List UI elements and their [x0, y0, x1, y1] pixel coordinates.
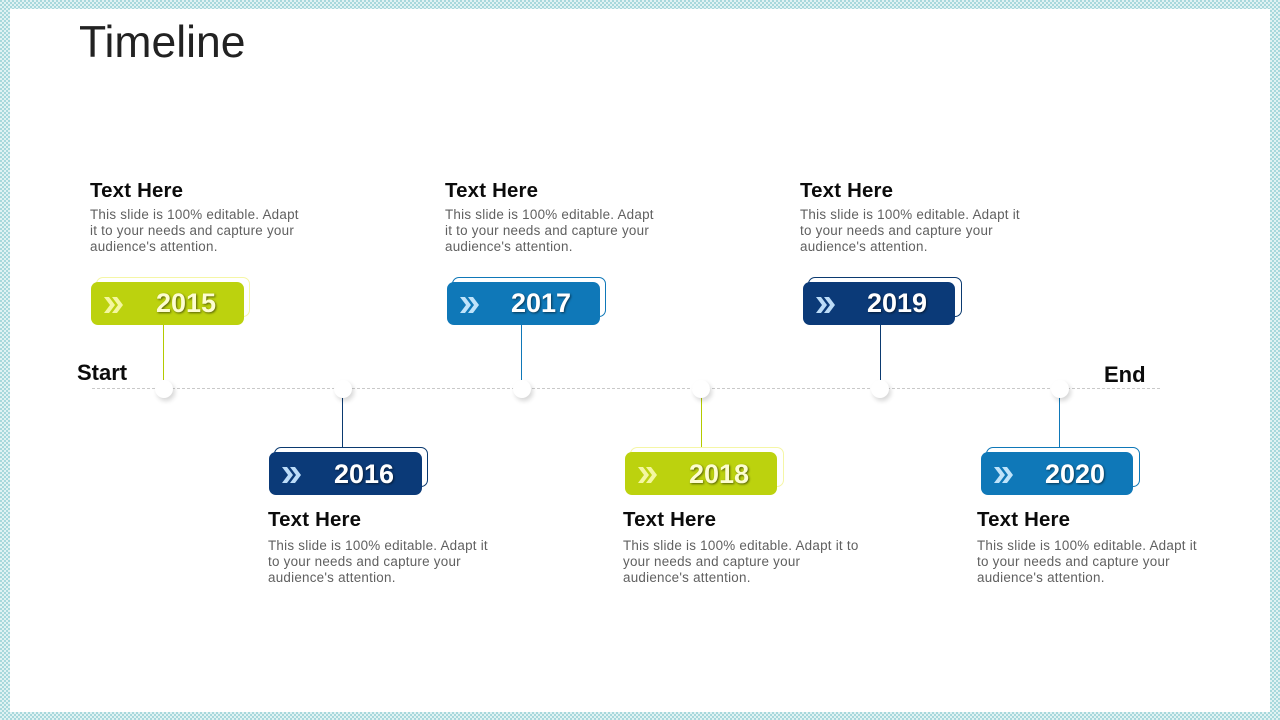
icon: chevrons 2017 [460, 297, 479, 313]
stem: 2018 [701, 396, 702, 454]
title: Timeline [79, 18, 246, 67]
heading: 2019: Text Here [800, 180, 893, 202]
badge: 2017: 2017 [511, 288, 571, 318]
heading: 2018: Text Here [623, 509, 716, 531]
icon: chevrons 2019 [816, 297, 835, 313]
badge: 2018: 2018 [689, 459, 749, 489]
text: 2015: This slide is 100% editable. Adapt [90, 207, 299, 222]
text: 2019 [800, 207, 1020, 254]
badge: 2016 [269, 447, 428, 495]
badge: 2019 [803, 277, 962, 325]
stem: 2015 [163, 322, 164, 380]
timeline axis [92, 388, 1160, 389]
heading: 2020: Text Here [977, 509, 1070, 531]
text: 2018: your needs and capture your [623, 554, 800, 569]
text: 2016: This slide is 100% editable. Adapt it [268, 538, 488, 553]
badge: 2016: 2016 [334, 459, 394, 489]
stem: 2017 [521, 322, 522, 380]
badge: 2015: 2015 [156, 288, 216, 318]
label: end: End [1104, 362, 1146, 387]
badge: 2018 [625, 447, 784, 495]
text: 2020: audience's attention. [977, 570, 1105, 585]
text: 2015: it to your needs and capture your [90, 223, 294, 238]
text: 2020: to your needs and capture your [977, 554, 1170, 569]
heading: 2016: Text Here [268, 509, 361, 531]
badge: 2015 [91, 277, 250, 325]
text: 2018: This slide is 100% editable. Adapt it to [623, 538, 859, 553]
marker: 2015 [155, 380, 173, 398]
stem: 2016 [342, 396, 343, 454]
badge: 2020 [981, 447, 1140, 495]
icon: chevrons 2015 [104, 297, 123, 313]
text: 2020: This slide is 100% editable. Adapt it [977, 538, 1197, 553]
badge: 2020: 2020 [1045, 459, 1105, 489]
heading: 2017: Text Here [445, 180, 538, 202]
text: 2019: audience's attention. [800, 239, 928, 254]
text: 2017: it to your needs and capture your [445, 223, 649, 238]
heading: 2015: Text Here [90, 180, 183, 202]
marker: 2016 [334, 380, 352, 398]
text: 2017: This slide is 100% editable. Adapt [445, 207, 654, 222]
marker: 2020 [1051, 380, 1069, 398]
badge: 2017 [447, 277, 606, 325]
icon: chevrons 2018 [638, 467, 657, 483]
icon: chevrons 2016 [282, 467, 301, 483]
stem: 2020 [1059, 396, 1060, 454]
text: 2017: audience's attention. [445, 239, 573, 254]
text: 2015 [90, 207, 299, 254]
icon: chevrons 2020 [994, 467, 1013, 483]
text: 2018 [623, 538, 859, 585]
badge: 2019: 2019 [867, 288, 927, 318]
text: 2015: audience's attention. [90, 239, 218, 254]
stem: 2019 [880, 322, 881, 380]
text: 2017 [445, 207, 654, 254]
text: 2018: audience's attention. [623, 570, 751, 585]
text: 2016: audience's attention. [268, 570, 396, 585]
marker: 2017 [513, 380, 531, 398]
text: 2019: to your needs and capture your [800, 223, 993, 238]
text: 2016: to your needs and capture your [268, 554, 461, 569]
marker: 2019 [871, 380, 889, 398]
text: 2020 [977, 538, 1197, 585]
text: 2019: This slide is 100% editable. Adapt it [800, 207, 1020, 222]
text: 2016 [268, 538, 488, 585]
marker: 2018 [692, 380, 710, 398]
label: start: Start [77, 360, 127, 385]
